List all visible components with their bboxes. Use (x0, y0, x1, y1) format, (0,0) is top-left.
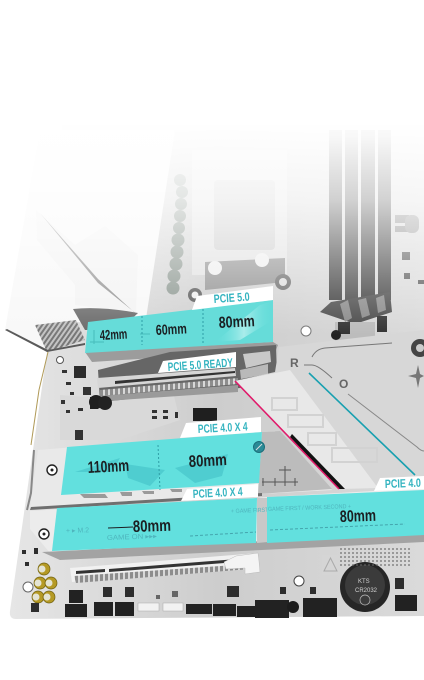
coin battery CR2032 (340, 562, 390, 612)
DIMM slots (320, 130, 392, 344)
coin battery CR2032: KTS (358, 579, 370, 585)
mounting hole right (294, 576, 304, 586)
heatsink screw (411, 339, 424, 357)
PCIe x16 slot (70, 553, 260, 583)
board pin field (340, 548, 410, 566)
second M.2 heatsink body (30, 431, 332, 510)
label: PCIE 4.0 right: PCIE 4.0 (385, 477, 421, 491)
coin battery CR2032: CR2032 (355, 588, 378, 594)
length label: 80mm (188, 451, 227, 471)
length label 42mm: 42mm (99, 326, 128, 344)
small chips (22, 548, 404, 612)
M.2 lower teal panel left: GAME ON ▸▸▸ (107, 532, 157, 542)
CPU socket (192, 150, 291, 290)
M.2 lower teal panel left (52, 498, 314, 551)
heatsink star emblem (408, 365, 424, 388)
length label 60mm: 60mm (155, 320, 187, 338)
label: PCIE 4.0 X 4 lower (181, 484, 258, 501)
M.2 lower teal panel right: GAME FIRST / WORK SECOND + (268, 504, 352, 513)
yellow capacitors (32, 563, 57, 603)
length label 80mm: 80mm (218, 313, 255, 332)
right armor heatsink (235, 330, 424, 490)
PCIE 5.0 slot assembly (97, 345, 277, 402)
label: PCIE 5.0 (192, 286, 273, 310)
label: PCIE 4.0 X 4 upper (180, 417, 261, 438)
white connectors (138, 603, 183, 611)
M.2 lower teal panel left: + ▸ M.2 (66, 527, 89, 535)
warning triangle mark (322, 555, 339, 575)
top fade overlay (0, 110, 424, 335)
motherboard base (10, 125, 424, 619)
M.2 lower teal panel right (267, 490, 424, 543)
label: PCIE 5.0: PCIE 5.0 (213, 290, 250, 306)
M.2 PCIE 5.0 heatsink body (85, 342, 278, 362)
heatsink letters: R (290, 356, 299, 370)
VRM chokes (166, 174, 202, 302)
length label: 80mm (340, 507, 376, 527)
M.2 heatsink 110mm and 80mm teal panel (61, 432, 262, 498)
heatsink letter O: O (339, 377, 348, 391)
right heatsink screw (254, 442, 264, 452)
bottom headers (65, 590, 417, 618)
right side components (301, 215, 424, 336)
label: PCIE 4.0 X 4 upper: PCIE 4.0 X 4 (198, 421, 248, 436)
label: PCIE 5.0 READY: PCIE 5.0 READY (167, 357, 233, 374)
M.2 lower teal panel left: + GAME FIRST / WORK SECOND (231, 506, 314, 515)
M.2 PCIE 5.0 teal panel (85, 300, 273, 353)
label: PCIE 5.0 READY (158, 352, 236, 374)
third M.2 heatsink body (27, 450, 424, 560)
length label: 110mm (87, 457, 130, 478)
mounting hole left (23, 582, 33, 592)
capacitors and chips near slot (31, 352, 217, 445)
length label: 80mm (132, 516, 171, 536)
cross markers (262, 466, 298, 486)
left heatsink shroud (5, 130, 175, 352)
label: PCIE 4.0 X 4 lower: PCIE 4.0 X 4 (193, 486, 243, 501)
